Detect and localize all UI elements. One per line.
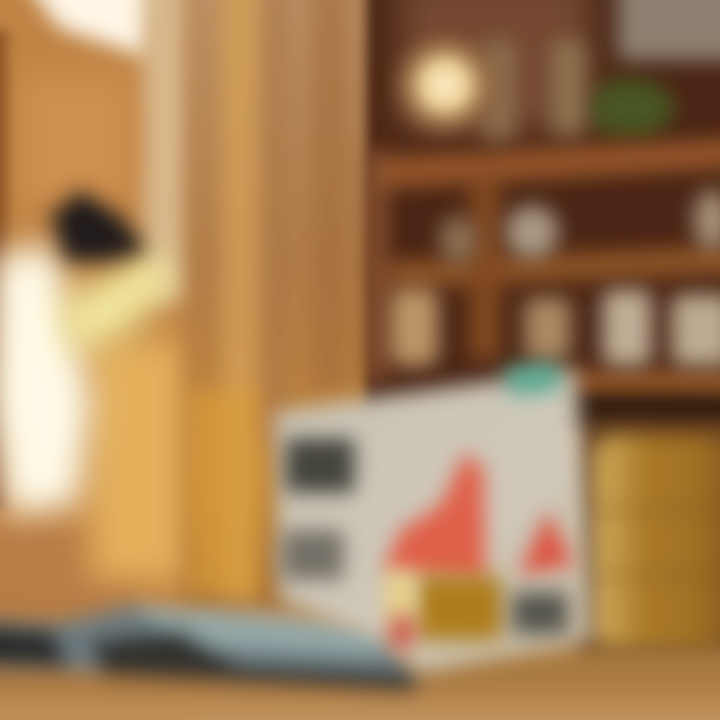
window frame — [142, 0, 190, 300]
dark ledge — [575, 395, 720, 427]
shelf boards — [368, 138, 720, 398]
yellow base — [385, 572, 415, 622]
lower wall — [0, 525, 140, 615]
top shelf backdrop — [400, 0, 590, 130]
green plant — [586, 78, 674, 138]
figure head — [50, 190, 148, 262]
shelf items — [390, 40, 720, 366]
figure arm — [55, 250, 180, 355]
panel: book at lower left — [0, 604, 420, 690]
panel: window and figure on the left — [0, 0, 200, 720]
left edge shadow — [0, 30, 8, 510]
panel: lower right background — [575, 420, 720, 680]
panel: curtain — [185, 0, 375, 610]
top right pale patch — [618, 0, 720, 60]
white figure — [0, 245, 92, 515]
card body — [275, 370, 592, 672]
red small peak — [518, 510, 574, 575]
yellow glow — [90, 340, 185, 580]
orange wall — [20, 75, 130, 205]
lamp — [385, 25, 505, 145]
panel: shelves — [365, 0, 720, 430]
teal tag — [505, 362, 560, 396]
window glare — [10, 0, 165, 58]
dark block upper — [285, 438, 355, 493]
red tall peak — [382, 452, 486, 580]
red base accent — [388, 614, 416, 650]
dark block lower — [282, 530, 344, 580]
icon: gold cylinder — [590, 435, 720, 650]
panel: infographic card — [275, 362, 592, 672]
gold stack — [415, 575, 503, 641]
small dark item — [512, 592, 568, 634]
panel: table — [0, 648, 720, 720]
